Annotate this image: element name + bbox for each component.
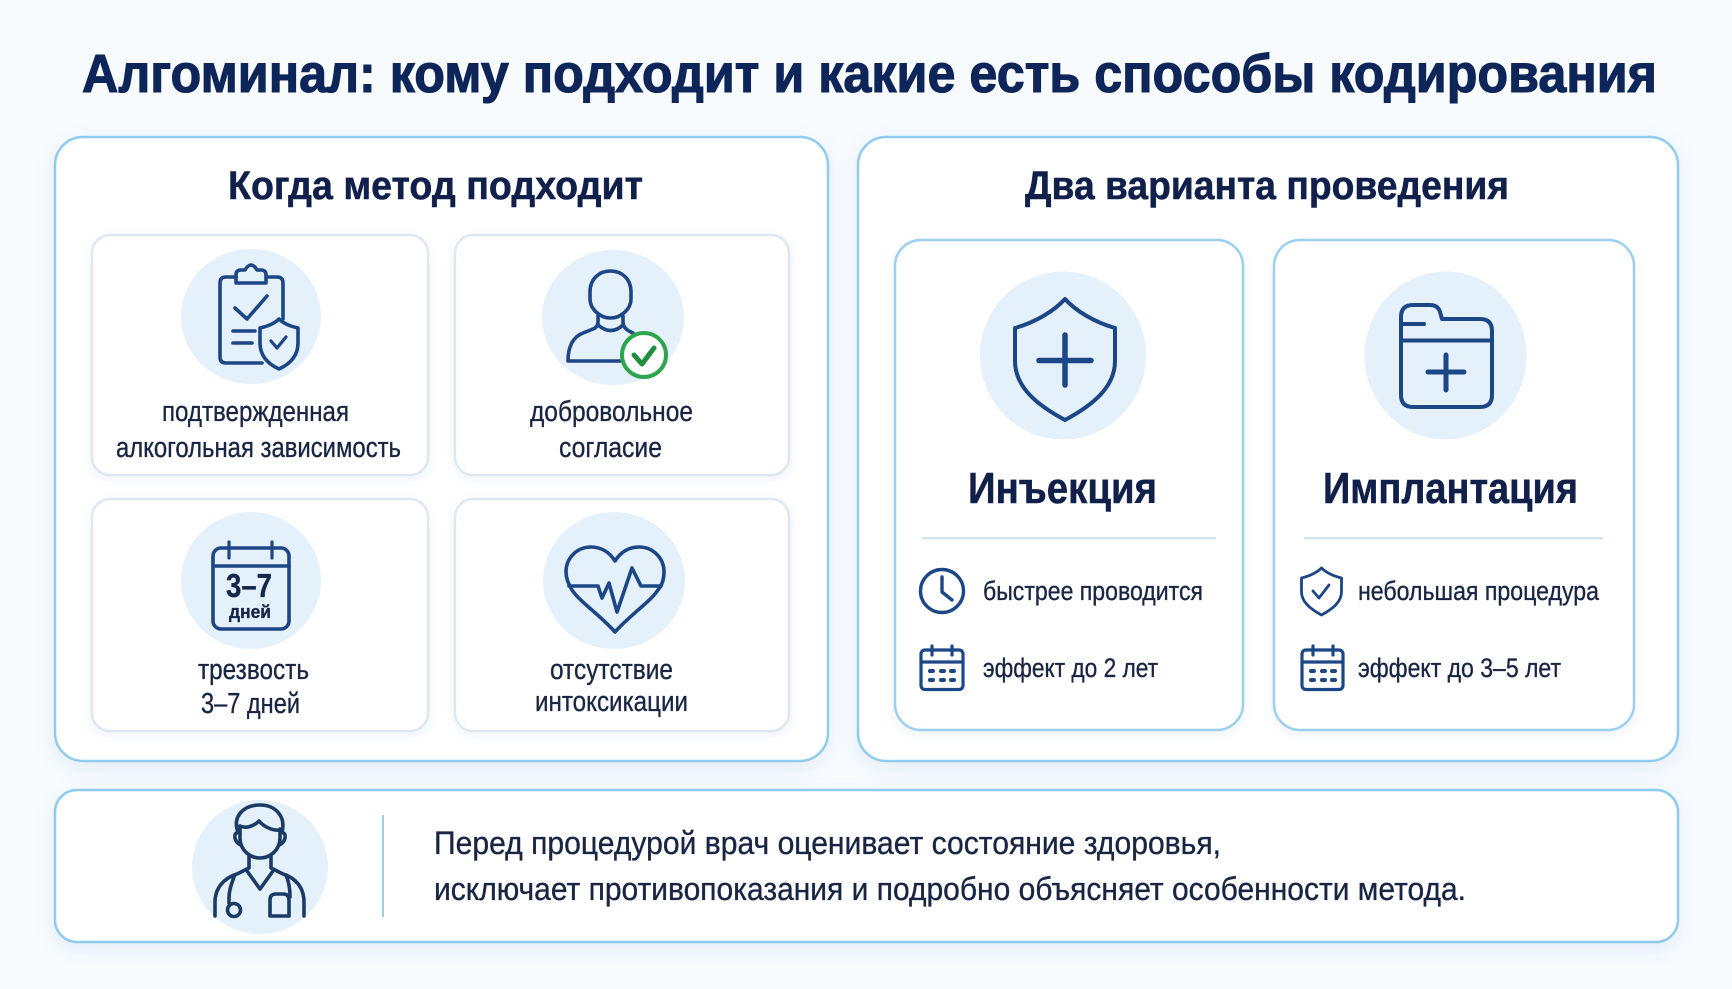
panel: when the method fits bbox=[55, 137, 828, 761]
text: no intoxication: отсутствие bbox=[550, 654, 673, 686]
icon: clipboard with shield bbox=[220, 265, 298, 369]
text: doctor note: исключает противопоказания и подробно объясняет особенности метода. bbox=[434, 871, 1466, 907]
text: confirmed dependence: подтвержденная bbox=[162, 396, 349, 428]
text: confirmed dependence bbox=[116, 396, 401, 464]
icon: shield with plus bbox=[1015, 299, 1115, 420]
icon: calendar 3-7 days bbox=[213, 542, 289, 629]
card: no intoxication bbox=[455, 499, 789, 731]
text: no intoxication: интоксикации bbox=[535, 686, 688, 718]
icon: calendar bbox=[1302, 646, 1343, 690]
item: effect up to 3-5 years: эффект до 3–5 лет bbox=[1358, 653, 1561, 683]
icon: calendar 3-7 days: 3–7 bbox=[226, 567, 272, 604]
item: effect up to 3-5 years bbox=[1302, 646, 1561, 690]
text: sobriety 3-7 days: трезвость bbox=[198, 654, 309, 686]
text: voluntary consent bbox=[530, 396, 693, 464]
item: small procedure bbox=[1302, 568, 1600, 615]
icon: folder with plus bbox=[1401, 305, 1492, 407]
icon: doctor bbox=[215, 805, 304, 916]
card: sobriety 3-7 days bbox=[92, 499, 428, 731]
card: implantation bbox=[1274, 240, 1634, 730]
icon: shield check bbox=[1302, 568, 1342, 615]
heading: implantation: Имплантация bbox=[1323, 464, 1578, 513]
item: faster: быстрее проводится bbox=[983, 576, 1203, 606]
text: doctor note bbox=[434, 825, 1466, 907]
item: small procedure: небольшая процедура bbox=[1358, 576, 1600, 606]
text: no intoxication bbox=[535, 654, 688, 718]
text: sobriety 3-7 days: 3–7 дней bbox=[201, 688, 300, 720]
item: effect up to 2 years bbox=[921, 646, 1158, 690]
icon: person with green check bbox=[568, 271, 666, 377]
text: confirmed dependence: алкогольная зависимость bbox=[116, 432, 401, 464]
icon: calendar 3-7 days: дней bbox=[229, 602, 271, 622]
item: effect up to 2 years: эффект до 2 лет bbox=[983, 653, 1158, 683]
panel: doctor note bbox=[55, 790, 1678, 942]
icon: calendar bbox=[921, 646, 963, 690]
card: voluntary consent bbox=[455, 235, 789, 475]
card: confirmed dependence bbox=[92, 235, 428, 475]
heading: injection: Инъекция bbox=[968, 464, 1157, 513]
panel: two options bbox=[858, 137, 1678, 761]
heading: two options: Два варианта проведения bbox=[1025, 164, 1509, 208]
text: sobriety 3-7 days bbox=[198, 654, 309, 720]
text: doctor note: Перед процедурой врач оценивает состояние здоровья, bbox=[434, 825, 1221, 861]
icon: heart with pulse bbox=[566, 547, 664, 632]
heading: when the method fits: Когда метод подходит bbox=[228, 164, 643, 208]
text: voluntary consent: согласие bbox=[559, 432, 662, 464]
text: voluntary consent: добровольное bbox=[530, 396, 693, 428]
item: faster bbox=[920, 570, 1203, 612]
card: injection bbox=[895, 240, 1243, 730]
title: Алгоминал: кому подходит и какие есть способы кодирования bbox=[82, 44, 1657, 104]
icon: clock bbox=[920, 570, 964, 612]
